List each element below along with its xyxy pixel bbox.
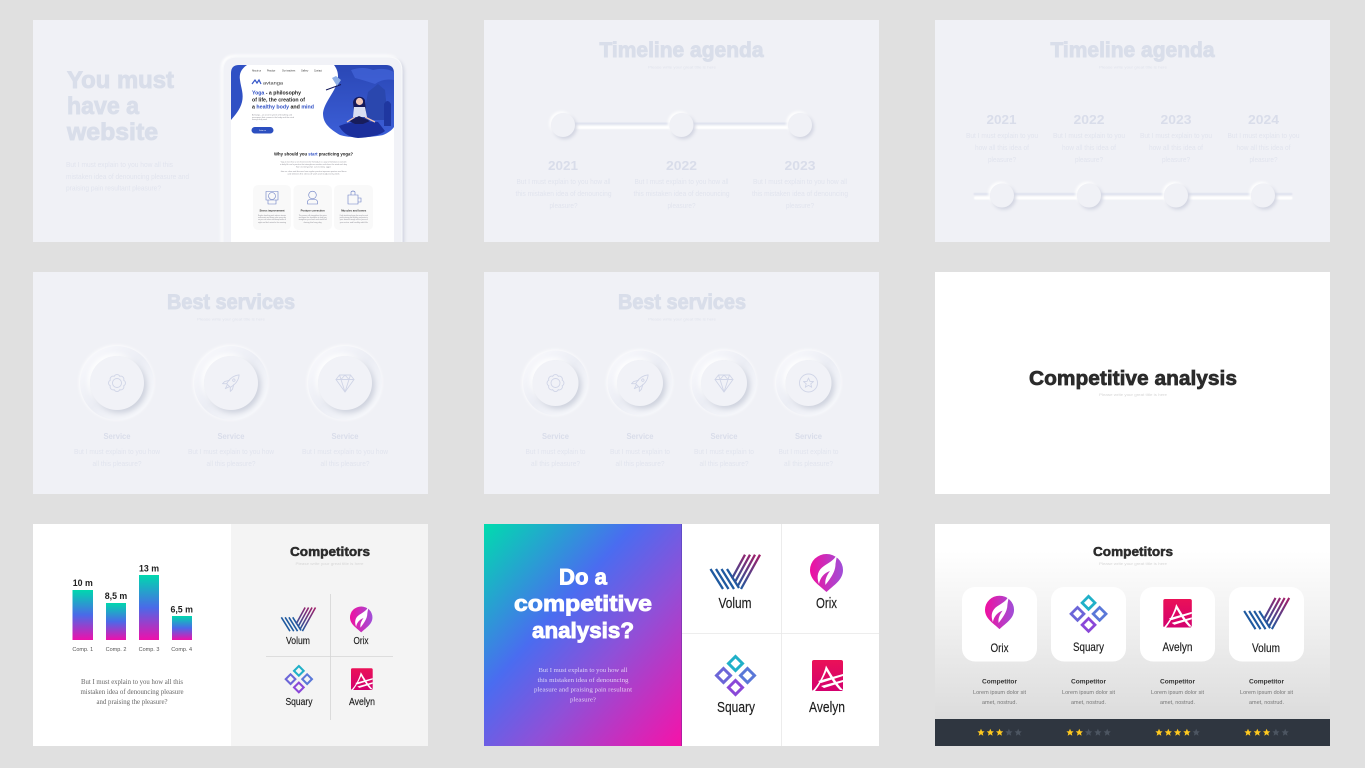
timeline node 2023 [788,113,812,137]
milestone 2022 [1053,112,1125,164]
logo: avtanga: avtanga [263,80,283,86]
card: posture correction: straighten your back and stand tall [299,218,327,221]
bar: comp 4: 6,5 m [170,604,193,614]
service text 3: all this pleasure? [320,459,370,468]
hero headline: of life, the creation of [252,98,305,104]
subtitle: Please write your great title is here [1099,66,1167,70]
card: squary: Squary [1073,640,1104,654]
service text 2 [610,432,670,468]
service text 3: But I must explain to you how [302,447,389,456]
logo: avelyn [349,668,375,708]
text block: chart description: mistaken idea of denouncing pleasure [80,688,184,696]
service button: gear [80,346,154,420]
milestone 2023 [1140,112,1212,164]
card: stress improvement: so you can relax and sleep better at [258,218,286,221]
section description: Join our class and discover how regular practice improves posture and focus [280,170,347,173]
logo: orix: Orix [354,635,369,647]
section heading: why start yoga: Why should you start practicing yoga? [274,152,353,156]
card: stress improvement [258,191,286,224]
competitor text 2: Lorem ipsum dolor sit [1062,690,1115,696]
section description: in daily life and a practice that strengthens muscles and clears the mind each day [280,163,347,166]
logo: volum [281,607,316,647]
timeline node 2023 [1164,184,1188,208]
panel: competitive analysis title slide [935,272,1330,494]
service text 1: all this pleasure? [531,459,580,468]
hero description: movement that connects the body and the mind [252,116,294,119]
logo grid dividers [682,524,879,746]
illustration: yoga hero scene [323,65,394,138]
card: muscles and bones: your active and healthy adult life [340,221,368,224]
milestone 2023: But I must explain to you [1140,131,1212,140]
timeline node 2022 [1077,184,1101,208]
service text 1: But I must explain to [526,447,586,456]
card: orix [962,587,1037,662]
competitor text 1 [973,678,1026,706]
service text 3: all this pleasure? [700,459,748,468]
panel: you must have a website [33,20,428,252]
service text 1: Service [542,432,570,441]
service text 3 [694,432,754,468]
competitor text 2: amet, nostrud. [1071,700,1106,706]
service text 2: Service [626,432,654,441]
milestone 2024: pleasure? [1250,155,1278,164]
logo: avtanga [252,80,283,86]
hero description: Ashtanga - an ancient system of breathing and [252,114,292,116]
rating: squary two stars [1066,729,1111,736]
bar: comp 2: 8,5 m [105,591,127,601]
button: join us: Join us [259,130,267,132]
card: posture correction: and open the shoulders to help you [299,216,327,219]
service button: gear [523,350,588,416]
card: posture correction: The poses will strengthen the spine [299,214,327,217]
bar: comp 1: Comp. 1 [72,647,93,653]
section description: Yoga is more than a set of exercises for the body, it is a way to find balance and calm [280,160,347,163]
milestone 2022: pleasure? [1075,155,1103,164]
card: volum [1229,587,1304,662]
heading: Do a [559,564,608,590]
bar: comp 3: Comp. 3 [139,647,159,653]
rating: avelyn four stars [1155,729,1200,736]
bar: comp 2 [105,591,127,653]
milestone 2021: 2021 [548,158,578,173]
service text 4: Service [795,432,823,441]
milestone 2022: But I must explain to you how all [634,177,729,186]
milestone 2021: how all this idea of [975,143,1029,152]
logo: volum [710,555,760,612]
logo: volum: Volum [718,596,752,612]
section description: for everyone at every age [296,165,331,168]
milestone 2022: how all this idea of [1062,143,1116,152]
subtitle: Please write your great title is here [648,318,716,322]
milestone 2023: how all this idea of [1149,143,1203,152]
text block: website description: praising pain resultant pleasure? [66,184,161,192]
bar: comp 4: Comp. 4 [171,647,192,653]
service text 1: Service [104,432,131,441]
heading: Timeline agenda [600,39,764,62]
bar: comp 2: Comp. 2 [106,647,126,653]
heading: Competitors [1093,544,1173,559]
service text 3 [302,432,389,468]
competitor text 4 [1240,678,1293,706]
service text 3: But I must explain to [694,447,754,456]
logo: squary: Squary [717,700,756,716]
milestone 2021: pleasure? [550,201,578,210]
service button: rocket [194,346,268,420]
card: muscles and bones: joints strong and flexible and protects [339,216,368,219]
logo: avelyn: Avelyn [349,696,375,708]
service text 2: Service [218,432,245,441]
service text 4 [778,432,838,468]
navigation menu: Our teachers [282,70,296,72]
rating: volum three stars [1244,729,1289,736]
bar chart [72,564,193,653]
section description: and relieves the stress of work and study every week [288,172,340,175]
panel: timeline agenda four years [935,20,1330,242]
panel: best services four columns [484,272,879,494]
milestone 2022: 2022 [666,158,697,173]
competitor text 1: amet, nostrud. [982,700,1017,706]
text block: description [534,667,632,704]
milestone 2022 [634,158,730,210]
logo: orix [810,553,843,612]
bar: comp 1 [72,578,93,653]
heading: you must have a website: have a [67,93,140,120]
card: stress improvement: night and feel rested in the morning [258,221,286,224]
section description [280,160,347,175]
timeline track [563,122,800,129]
service text 2 [188,432,275,468]
milestone 2024: But I must explain to you [1228,131,1300,140]
text block: description: this mistaken idea of denouncing [538,677,629,684]
navigation menu: Practice [267,70,276,72]
heading: Competitive analysis [1029,368,1237,390]
navigation menu [252,70,322,72]
card: squary [1051,587,1126,662]
text block: description: But I must explain to you how all [538,667,628,674]
card: muscles and bones: Daily stretching keeps the muscles and [340,214,368,217]
text block: chart description [80,678,184,706]
milestone 2023: 2023 [1160,112,1192,127]
panel: competitors cards and ratings [935,524,1330,746]
logo: avelyn: Avelyn [809,700,845,716]
navigation menu: Gallery [301,70,309,72]
panel: competitors bar chart and logo grid [33,524,428,746]
milestone 2021: But I must explain to you how all [516,177,611,186]
tablet mockup: yoga website [223,57,402,252]
timeline track [974,193,1292,200]
milestone 2022: But I must explain to you [1053,131,1125,140]
card: avelyn: Avelyn [1162,640,1192,654]
milestone 2023 [752,158,848,210]
panel: best services three columns [33,272,428,494]
competitor text 4: amet, nostrud. [1249,700,1284,706]
competitor text 3: amet, nostrud. [1160,700,1195,706]
text block: website description [66,160,189,192]
logo: orix: Orix [816,596,838,612]
service text 3: Service [710,432,738,441]
card: stress improvement: and anxiety and brings calm every day [258,216,286,219]
bar: comp 4 [170,604,193,653]
bar: comp 1: 10 m [73,578,93,588]
gradient hero block [484,524,682,746]
panel: do a competitive analysis [484,524,879,746]
service text 4: But I must explain to [778,447,838,456]
navigation menu: Contact [314,70,322,72]
card: posture correction: Posture correction [301,210,325,212]
card: stress improvement: Regular breathing work reduces tension [258,214,286,217]
milestone 2023: this mistaken idea of denouncing [752,189,848,198]
service button: rocket [608,350,672,416]
milestone 2021 [966,112,1038,164]
bar: comp 3 [139,564,159,653]
service text 4: all this pleasure? [784,459,833,468]
milestone 2022: this mistaken idea of denouncing [634,189,730,198]
milestone 2022: pleasure? [668,201,696,210]
service button: diamond [692,350,756,416]
timeline node 2021 [551,113,575,137]
service text 2: But I must explain to you how [188,447,275,456]
logo: squary [716,656,756,716]
heading: you must have a website: You must [67,67,174,94]
heading: Best services [167,291,295,314]
milestone 2024 [1228,112,1300,164]
panel: timeline agenda three years [484,20,879,242]
competitor text 3 [1151,678,1204,706]
timeline node 2022 [670,113,694,137]
card: orix: Orix [990,641,1008,655]
hero description [252,114,294,120]
card: avelyn [1140,587,1215,662]
navigation menu: About us [252,70,262,72]
hero description: through daily work [252,118,267,121]
milestone 2024: how all this idea of [1236,143,1290,152]
competitor text 1: Competitor [982,678,1018,686]
rating bar [935,719,1330,746]
milestone 2023: But I must explain to you how all [753,177,847,186]
milestone 2023: pleasure? [1162,155,1190,164]
bar: comp 3: 13 m [139,564,159,574]
service text 2: all this pleasure? [616,459,664,468]
hero headline: a healthy body and mind [252,104,314,110]
competitor text 4: Competitor [1249,678,1285,686]
service text 1: But I must explain to you how [74,447,161,456]
competitor text 2: Competitor [1071,678,1107,686]
logo: orix [350,606,372,647]
subtitle: Please write your great title is here [197,318,265,322]
service text 1 [74,432,161,468]
subtitle: Please write your great title is here [1099,393,1167,397]
competitor text 4: Lorem ipsum dolor sit [1240,690,1293,696]
milestone 2024: 2024 [1248,112,1280,127]
text block: website description: mistaken idea of denouncing pleasure and [66,172,189,181]
text block: description: pleasure and praising pain resultant [534,686,632,694]
timeline node 2021 [990,184,1014,208]
text block: chart description: But I must explain to you how all this [81,678,183,686]
service text 2: all this pleasure? [206,459,256,468]
text block: website description: But I must explain to you how all this [66,160,173,169]
competitor text 1: Lorem ipsum dolor sit [973,690,1026,696]
hero headline: Yoga - a philosophy [252,90,301,96]
milestone 2021: 2021 [986,112,1016,127]
competitor text 2 [1062,678,1115,706]
milestone 2021: pleasure? [988,155,1016,164]
service text 1: all this pleasure? [92,459,142,468]
heading: competitive [514,591,652,616]
heading: Best services [618,291,746,314]
card: muscles and bones: Muscles and bones [341,210,367,212]
subtitle: Please write your great title is here [648,66,716,70]
text block: description: pleasure? [570,696,596,704]
logo: avelyn [809,660,845,716]
logo: squary: Squary [286,696,313,708]
subtitle: Please write your great title is here [296,562,364,566]
heading: analysis? [532,618,634,643]
logo: squary [286,666,313,708]
competitor text 3: Lorem ipsum dolor sit [1151,690,1204,696]
heading: Competitors [290,544,370,559]
service button: star [776,350,841,416]
milestone 2021 [516,158,612,210]
logo grid dividers [266,594,393,720]
milestone 2023: pleasure? [786,201,814,210]
milestone 2022: 2022 [1074,112,1104,127]
rating: orix three stars [977,729,1022,736]
card: stress improvement: Stress improvement [260,210,285,212]
card: posture correction [298,190,327,224]
card: posture correction: during the long day [304,221,322,224]
service text 1 [526,432,586,468]
logo: volum: Volum [286,635,310,647]
text block: chart description: and praising the pleasure? [96,698,168,706]
milestone 2021: But I must explain to you [966,131,1038,140]
heading [514,564,652,643]
card: volum: Volum [1252,641,1280,655]
hero headline [252,90,314,110]
button: join us [252,127,274,134]
heading: Timeline agenda [1050,39,1215,62]
card: muscles and bones: your bones through all the years of [340,218,368,221]
service text 3: Service [332,432,359,441]
subtitle: Please write your great title is here [1099,562,1167,566]
heading: you must have a website: website [66,119,158,146]
heading: you must have a website [66,71,174,140]
timeline node 2024 [1251,184,1275,208]
service text 2: But I must explain to [610,447,670,456]
competitor text 3: Competitor [1160,678,1196,686]
illustration: left blue wave [231,65,247,120]
card: muscles and bones [340,190,368,224]
milestone 2023: 2023 [784,158,816,173]
milestone 2021: this mistaken idea of denouncing [516,189,612,198]
service button: diamond [308,346,382,420]
